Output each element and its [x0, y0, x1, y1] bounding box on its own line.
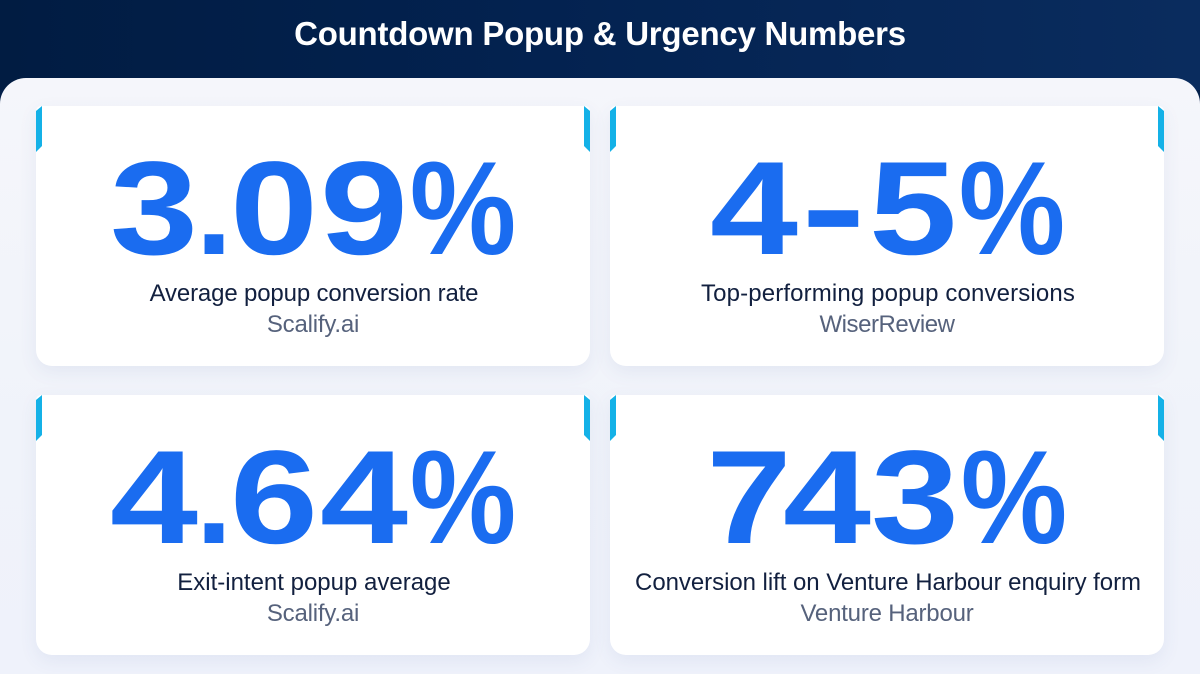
stat number: % — [958, 135, 1065, 283]
accent: left — [36, 106, 42, 152]
accent: right — [584, 106, 590, 152]
accent: left — [610, 395, 616, 441]
stat number: 7 — [706, 424, 791, 572]
stat number: 4 — [709, 135, 798, 283]
stat source: WiserReview — [819, 311, 955, 338]
stat number — [706, 424, 1067, 572]
header band — [0, 0, 1200, 90]
stat number — [110, 424, 516, 572]
accent: left — [36, 395, 42, 441]
accent: left — [610, 106, 616, 152]
stat source: Venture Harbour — [800, 600, 974, 627]
panel: exit-intent popup average — [36, 395, 590, 655]
accent: right — [1158, 395, 1164, 441]
stat source: Scalify.ai — [267, 600, 359, 627]
stat label: Average popup conversion rate — [150, 280, 478, 307]
stat number: 4 — [782, 424, 871, 572]
stat number: . — [196, 424, 232, 572]
stat label: Conversion lift on Venture Harbour enquiry form — [635, 569, 1141, 596]
panel: average popup conversion rate — [36, 106, 590, 366]
stat number: 0 — [230, 135, 318, 283]
title: Countdown Popup & Urgency Numbers — [294, 15, 906, 52]
stat number: % — [410, 424, 516, 572]
stat number: 3 — [871, 424, 959, 572]
stat number: 3 — [110, 135, 198, 283]
accent: right — [1158, 106, 1164, 152]
panel: conversion lift — [610, 395, 1164, 655]
panel: top-performing popup conversions — [610, 106, 1164, 366]
stat number: 4 — [320, 424, 408, 572]
stat number: 5 — [868, 135, 957, 283]
stat number: % — [410, 135, 516, 283]
stat number — [709, 130, 1065, 285]
stat number — [110, 135, 516, 283]
stat number: - — [800, 130, 866, 285]
stat label: Top-performing popup conversions — [701, 280, 1075, 307]
stat source: Scalify.ai — [267, 311, 359, 338]
stat label: Exit-intent popup average — [177, 569, 451, 596]
stat number: % — [961, 424, 1067, 572]
stat number: 4 — [110, 424, 198, 572]
stat number: . — [196, 135, 232, 283]
stat number: 9 — [320, 135, 408, 283]
accent: right — [584, 395, 590, 441]
stat number: 6 — [230, 424, 318, 572]
